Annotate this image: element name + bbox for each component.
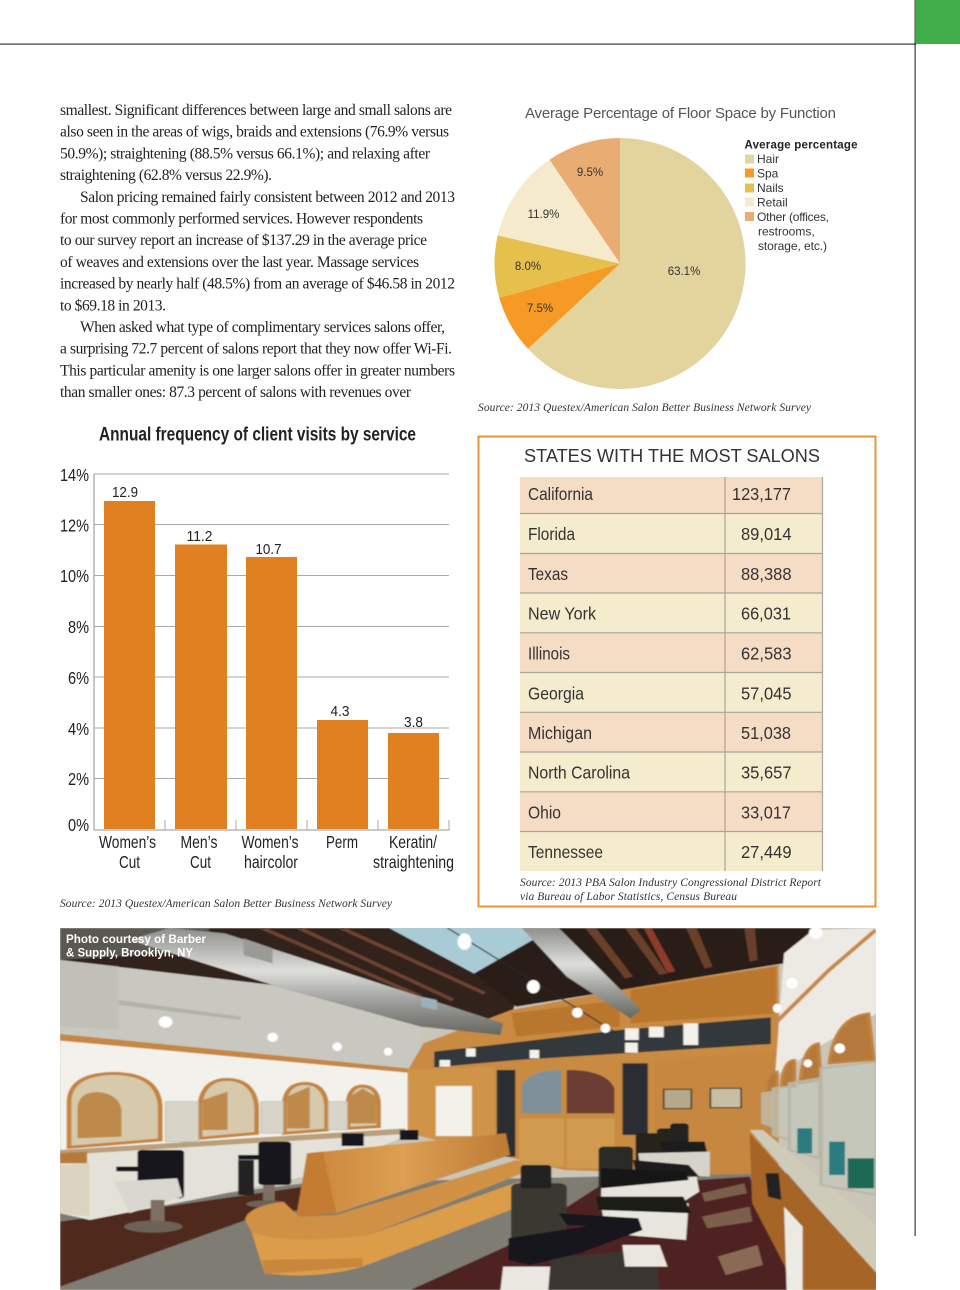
slice: other 9.5% xyxy=(550,138,620,264)
photo credit xyxy=(66,934,207,960)
bar values: 10.7 xyxy=(256,541,282,558)
salon counts: 35,657 xyxy=(741,762,792,782)
body text column: to $69.18 in 2013. xyxy=(60,297,166,314)
salon counts: 66,031 xyxy=(741,604,791,624)
pie source note: Source: 2013 Questex/American Salon Better Business Network Survey xyxy=(478,402,812,414)
pie legend: Average percentage xyxy=(744,140,858,152)
state names: Illinois xyxy=(528,644,570,664)
photo: barbershop interior xyxy=(50,920,880,1290)
pie legend: Retail xyxy=(757,196,788,210)
category labels: Women’s xyxy=(99,832,156,852)
salon counts: 57,045 xyxy=(741,684,792,704)
green corner tab xyxy=(916,0,960,44)
pie value labels: 7.5% xyxy=(527,303,553,315)
bar values: 11.2 xyxy=(186,528,212,545)
body text column: 50.9%); straightening (88.5% versus 66.1%); and relaxing after xyxy=(60,145,431,162)
left chairs xyxy=(116,1130,418,1198)
right chairs xyxy=(500,1123,763,1290)
bar chart source note: Source: 2013 Questex/American Salon Better Business Network Survey xyxy=(60,898,393,910)
bar values xyxy=(112,484,423,731)
mirrors xyxy=(69,1073,379,1147)
pie legend: Other (offices, xyxy=(757,210,829,224)
salon counts: 89,014 xyxy=(741,524,792,544)
body text column: also seen in the areas of wigs, braids and extensions (76.9% versus xyxy=(60,124,449,141)
body text column: Salon pricing remained fairly consistent between 2012 and 2013 xyxy=(80,189,455,206)
body text column: increased by nearly half (48.5%) from an average of $46.58 in 2012 xyxy=(60,276,455,293)
table source note xyxy=(520,877,822,903)
category labels: haircolor xyxy=(244,852,298,872)
pie value labels xyxy=(515,167,700,315)
pie legend: Nails xyxy=(757,181,784,195)
body text column: than smaller ones: 87.3 percent of salons with revenues over xyxy=(60,384,412,401)
pie value labels: 8.0% xyxy=(515,261,541,273)
bars xyxy=(104,501,439,829)
body text column: smallest. Significant differences between large and small salons are xyxy=(60,102,452,119)
pie legend: restrooms, xyxy=(758,224,815,238)
y axis labels: 14% xyxy=(60,465,89,485)
bench xyxy=(245,1133,535,1276)
pie value labels: 9.5% xyxy=(577,167,603,179)
salon counts xyxy=(732,484,792,862)
salon counts: 27,449 xyxy=(741,842,792,862)
body text column: of weaves and extensions over the last year. Massage services xyxy=(60,254,419,271)
body text column: straightening (62.8% versus 22.9%). xyxy=(60,167,272,184)
bar values: 12.9 xyxy=(112,484,138,501)
salon counts: 51,038 xyxy=(741,723,791,743)
salon counts: 88,388 xyxy=(741,564,792,584)
body text column: When asked what type of complimentary services salons offer, xyxy=(80,319,445,336)
table rows xyxy=(520,477,823,871)
body text column: to our survey report an increase of $137.29 in the average price xyxy=(60,232,427,249)
category labels: Women’s xyxy=(242,832,299,852)
table heading: STATES WITH THE MOST SALONS xyxy=(524,445,820,466)
y axis labels xyxy=(60,465,89,835)
bar chart: annual frequency of client visits xyxy=(60,465,454,872)
pie legend: Hair xyxy=(757,152,779,166)
bar values: 4.3 xyxy=(330,703,350,720)
state names: Florida xyxy=(528,524,575,544)
bar chart title: Annual frequency of client visits by service xyxy=(99,424,416,446)
y axis labels: 2% xyxy=(68,769,89,789)
pie legend xyxy=(744,140,858,253)
photo credit: & Supply, Brooklyn, NY xyxy=(66,948,193,960)
state names xyxy=(528,484,630,862)
state names: Texas xyxy=(528,564,568,584)
slice: nails 8.0% xyxy=(495,235,620,298)
body text column: This particular amenity is one larger salons offer in greater numbers xyxy=(60,362,455,379)
body text column: a surprising 72.7 percent of salons report that they now offer Wi-Fi. xyxy=(60,341,452,358)
table source note: via Bureau of Labor Statistics, Census Bureau xyxy=(520,891,737,903)
bar values: 3.8 xyxy=(404,714,423,731)
table source note: Source: 2013 PBA Salon Industry Congressional District Report xyxy=(520,877,822,889)
slice: spa 7.5% xyxy=(499,264,620,349)
y axis labels: 0% xyxy=(68,815,89,835)
pie chart title: Average Percentage of Floor Space by Function xyxy=(525,105,836,122)
pie value labels: 63.1% xyxy=(668,266,700,278)
state names: Georgia xyxy=(528,684,584,704)
category labels: Perm xyxy=(326,832,358,852)
pie value labels: 11.9% xyxy=(528,209,559,221)
category labels: straightening xyxy=(373,852,454,872)
category labels: Keratin/ xyxy=(389,832,437,852)
y axis labels: 4% xyxy=(68,719,89,739)
state names: New York xyxy=(528,604,596,624)
slice: retail 11.9% xyxy=(498,160,620,264)
state names: North Carolina xyxy=(528,762,630,782)
pie chart: floor space by function xyxy=(495,138,746,389)
slice: hair 63.1% xyxy=(528,138,746,389)
state names: Ohio xyxy=(528,802,561,822)
y axis labels: 6% xyxy=(68,668,89,688)
salon counts: 123,177 xyxy=(732,484,791,504)
right counter xyxy=(749,1129,816,1206)
state names: California xyxy=(528,484,593,504)
y axis labels: 12% xyxy=(60,516,89,536)
salon counts: 62,583 xyxy=(741,644,792,664)
pie legend: storage, etc.) xyxy=(758,239,827,253)
photo credit: Photo courtesy of Barber xyxy=(66,934,207,946)
state names: Michigan xyxy=(528,723,592,743)
category labels: Men’s xyxy=(180,832,218,852)
state names: Tennessee xyxy=(528,842,603,862)
salon counts: 33,017 xyxy=(741,802,791,822)
y axis labels: 10% xyxy=(60,566,89,586)
category labels xyxy=(99,832,454,872)
body text column xyxy=(60,102,455,401)
panel: states with the most salons xyxy=(478,436,876,906)
pie legend: Spa xyxy=(757,166,779,180)
category labels: Cut xyxy=(190,852,211,872)
body text column: for most commonly performed services. However respondents xyxy=(60,210,423,228)
category labels: Cut xyxy=(119,852,140,872)
y axis labels: 8% xyxy=(68,617,89,637)
